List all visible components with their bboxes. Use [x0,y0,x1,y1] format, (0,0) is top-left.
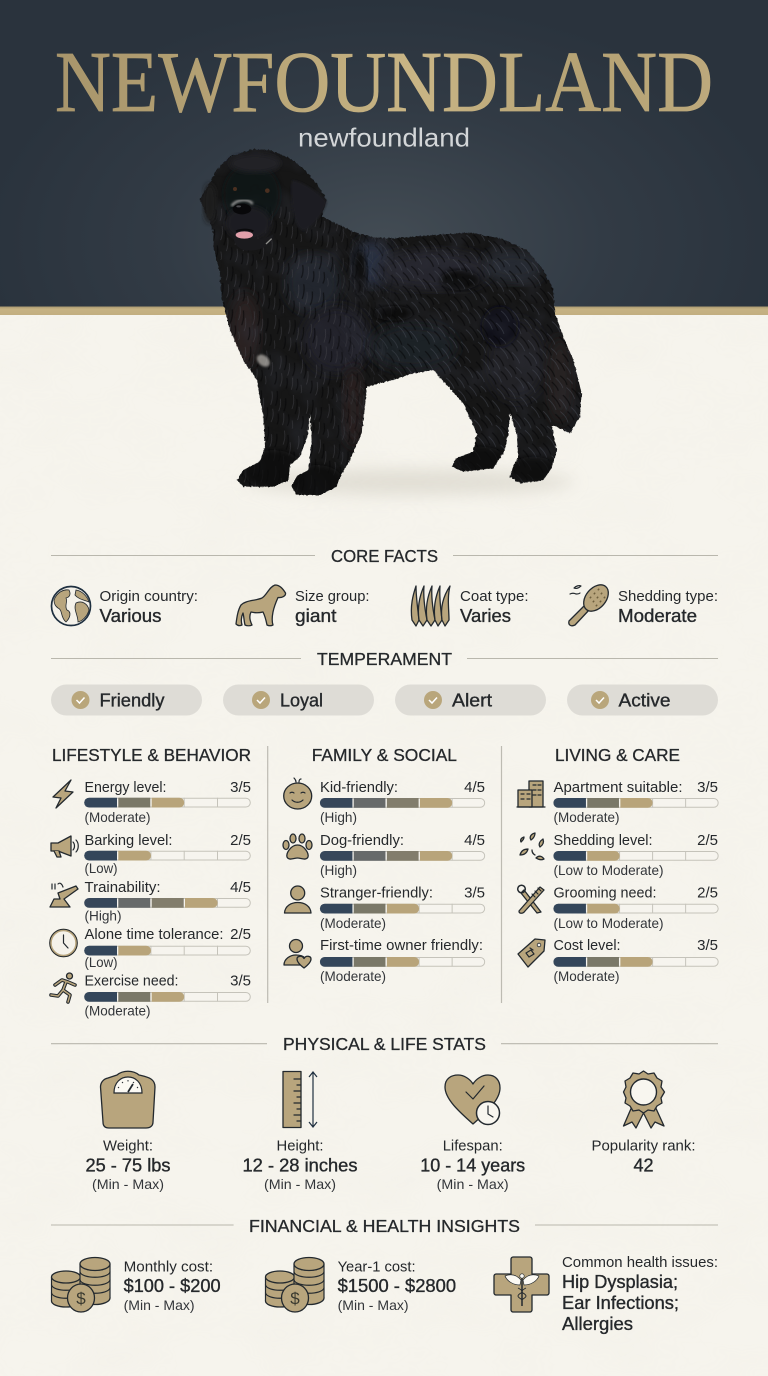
rating: apartment suitable: Apartment suitable: [554,779,682,796]
health issues: Allergies [562,1314,633,1334]
rating: stranger-friendly: Stranger-friendly: [320,884,433,901]
core fact: origin country [52,586,198,626]
stat: weight: 25 - 75 lbs [86,1156,170,1176]
icon: dog [236,585,286,626]
core fact: shedding type: Moderate [618,606,697,626]
dog fur on the chest and legs [213,206,384,495]
rating: kid-friendly: 4/5 [464,779,485,796]
health issues: Ear Infections; [562,1293,679,1313]
rating: exercise need: (Moderate) [84,1003,150,1019]
rating: barking level: (Low) [84,860,118,876]
rating: alone time tolerance: 2/5 [230,926,251,943]
core fact: origin country: Origin country: [100,588,198,605]
icon: coins: $ [290,1289,300,1308]
stat: lifespan: Lifespan: [443,1138,503,1155]
section heading: core facts: CORE FACTS [331,546,438,566]
pill: active [567,684,718,716]
rating: apartment suitable: 3/5 [697,779,718,796]
health issues: Common health issues: [562,1254,718,1271]
pill: alert [395,684,546,716]
rating: exercise need [51,973,251,1019]
rating: alone time tolerance [50,926,251,970]
dog head [203,154,327,251]
pill: active: Active [618,690,670,710]
section heading: financial and health insights: FINANCIAL & HEALTH INSIGHTS [249,1216,520,1236]
core fact: coat type [411,586,528,626]
rating: energy level [53,779,251,825]
core fact: size group [236,585,370,626]
rating: alone time tolerance: (Low) [84,954,118,970]
finance: year-1 cost: $1500 - $2800 [338,1276,456,1296]
icon: coins [52,1258,110,1312]
core fact: origin country: Various [100,606,162,626]
rating: stranger-friendly: 3/5 [464,884,485,901]
stat: weight: Weight: [103,1138,153,1155]
rating: stranger-friendly [284,884,485,931]
rating: dog-friendly [283,832,485,878]
pill: loyal [223,684,374,716]
column: lifestyle and behavior [50,745,251,1019]
icon: coins: $ [76,1289,86,1308]
rating: dog-friendly: (High) [320,862,357,878]
health issues: Hip Dysplasia; [562,1272,678,1292]
section heading: physical and life stats: PHYSICAL & LIFE STATS [283,1034,486,1054]
rating: trainability: Trainability: [84,879,160,896]
rating: cost level: 3/5 [697,937,718,954]
core fact: size group: Size group: [295,588,370,605]
rating: cost level [518,937,718,984]
pill: friendly: Friendly [100,690,164,710]
rating: exercise need: 3/5 [230,973,251,990]
rating: stranger-friendly: (Moderate) [320,915,386,931]
stat: popularity rank: 42 [634,1156,654,1176]
rating: first-time owner friendly: (Moderate) [320,968,386,984]
finance: year-1 cost: Year-1 cost: [338,1259,416,1276]
icon: globe [52,586,90,626]
rating: shedding level: Shedding level: [554,832,652,849]
finance: monthly cost: Monthly cost: [124,1259,213,1276]
rating: grooming need: (Low to Moderate) [554,915,664,931]
rating: shedding level: 2/5 [697,832,718,849]
rating: trainability [50,879,251,924]
rating: grooming need [518,884,718,931]
core fact: shedding type [569,580,718,626]
icon: ribbon [624,1071,664,1128]
stat: height: Height: [276,1138,324,1155]
stat: height: 12 - 28 inches [242,1156,358,1176]
core fact: coat type: Coat type: [460,588,528,605]
column: living and care [517,745,718,984]
finance: monthly cost: $100 - $200 [124,1276,221,1296]
rating: barking level: 2/5 [230,832,251,849]
stat: popularity rank: Popularity rank: [592,1138,696,1155]
finance: monthly cost [52,1258,221,1313]
icon: coat hair [411,586,450,626]
rating: apartment suitable [517,779,718,825]
rating: first-time owner friendly: First-time owner friendly: [320,937,483,954]
dog shadow [245,469,575,495]
stat: weight: (Min - Max) [92,1176,164,1192]
icon: medical cross [494,1257,549,1312]
rating: trainability: (High) [84,908,122,924]
pill: friendly [51,684,202,716]
core fact: shedding type: Shedding type: [618,588,718,605]
pill: alert: Alert [452,690,492,710]
dog illustration [200,148,583,496]
stat: weight [86,1071,170,1192]
pill: loyal: Loyal [280,690,323,710]
stat: height [242,1072,358,1192]
rating: kid-friendly [284,778,485,825]
icon: scale [100,1071,155,1128]
rating: alone time tolerance: Alone time tolerance: [84,926,224,943]
rating: trainability: 4/5 [230,879,251,896]
rating: energy level: Energy level: [84,779,166,796]
stat: popularity rank [592,1071,696,1176]
finance: monthly cost: (Min - Max) [124,1297,195,1313]
rating: kid-friendly: Kid-friendly: [320,779,398,796]
header panel [0,0,768,315]
rating: cost level: Cost level: [554,937,620,954]
health issues [494,1254,718,1334]
column divider [268,746,502,1003]
stat: lifespan [420,1075,525,1192]
rating: kid-friendly: (High) [320,809,357,825]
core fact: coat type: Varies [460,606,511,626]
rating: barking level [51,832,251,876]
icon: heart with clock [445,1075,500,1124]
finance: year-1 cost: (Min - Max) [338,1297,409,1313]
rating: shedding level: (Low to Moderate) [554,862,664,878]
dog fur on the body [346,233,582,483]
subtitle: newfoundland [298,122,470,152]
stat: height: (Min - Max) [264,1176,336,1192]
rating: energy level: 3/5 [230,779,251,796]
rating: first-time owner friendly [284,937,485,984]
rating: apartment suitable: (Moderate) [554,809,620,825]
rating: energy level: (Moderate) [84,809,150,825]
rating: cost level: (Moderate) [554,968,620,984]
core fact: size group: giant [295,606,336,626]
finance: year-1 cost [266,1258,456,1313]
icon: brush [569,580,613,626]
rating: shedding level [520,832,718,878]
heading: family: FAMILY & SOCIAL [312,745,457,765]
stat: lifespan: (Min - Max) [437,1176,509,1192]
rating: dog-friendly: 4/5 [464,832,485,849]
rating: barking level: Barking level: [84,832,172,849]
dog chest patch [254,352,272,369]
heading: living: LIVING & CARE [555,745,680,765]
column: family and social [283,745,485,984]
rating: grooming need: 2/5 [697,884,718,901]
section heading: temperament: TEMPERAMENT [317,649,452,669]
icon: ruler [283,1072,317,1128]
rating: exercise need: Exercise need: [84,973,178,990]
heading: lifestyle: LIFESTYLE & BEHAVIOR [52,745,251,765]
rating: grooming need: Grooming need: [554,884,656,901]
icon: coins [266,1258,324,1312]
stat: lifespan: 10 - 14 years [420,1156,525,1176]
rating: dog-friendly: Dog-friendly: [320,832,404,849]
